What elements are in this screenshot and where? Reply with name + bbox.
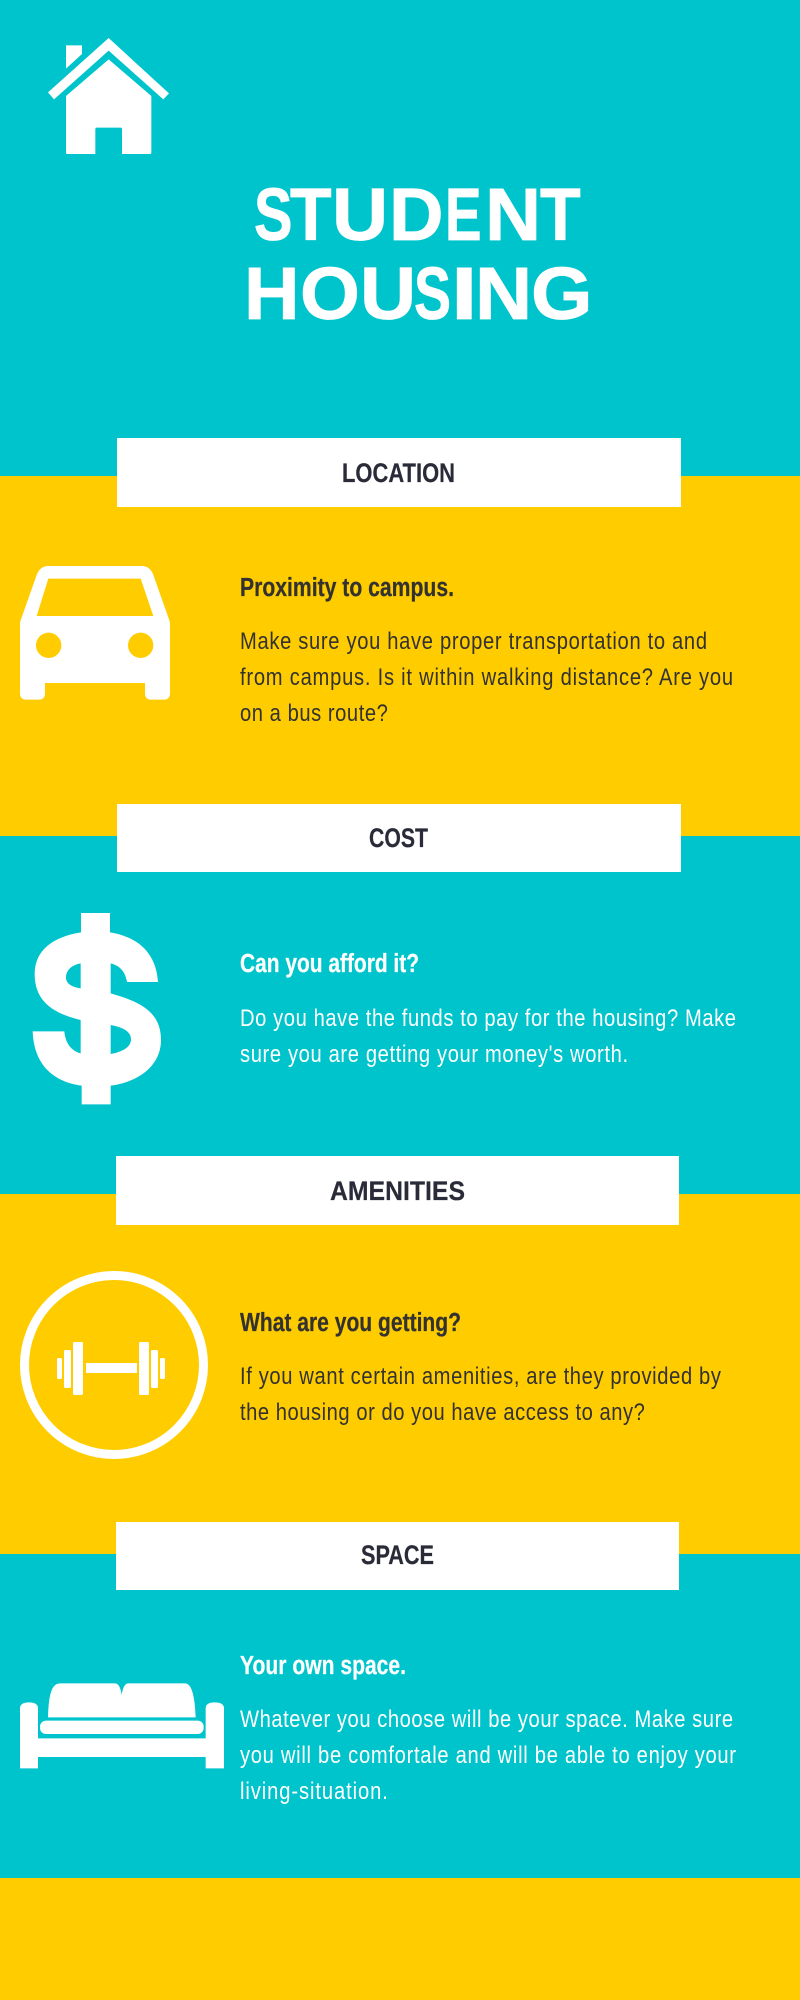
icon: house [48,38,169,154]
cost body text: Do you have the funds to pay for the housing? Make [240,1004,736,1031]
panel: location [20,438,733,726]
space body text [240,1705,737,1804]
title: D [389,173,443,256]
band: header background [0,0,800,476]
location header card [117,438,681,507]
space body text: living-situation. [240,1777,388,1804]
title: I [451,252,477,335]
amenities heading: What are you getting? [240,1309,461,1337]
space body text: Whatever you choose will be your space. Make sure [240,1705,733,1732]
location header card: LOCATION [342,458,455,488]
title: U [332,173,388,256]
title: G [531,252,593,335]
panel: amenities [24,1156,722,1454]
icon: sofa [20,1683,224,1768]
space header card [116,1522,679,1590]
space body text: you will be comfortale and will be able to enjoy your [240,1741,737,1768]
title: N [475,252,532,335]
title: S [254,173,292,256]
location heading: Proximity to campus. [240,574,454,602]
location body text: from campus. Is it within walking distance? Are you [240,663,733,690]
band: cost background [0,836,800,1194]
title [244,173,593,335]
title: U [360,252,416,335]
amenities body text: If you want certain amenities, are they provided by [240,1362,722,1389]
amenities header card: AMENITIES [330,1176,465,1206]
cost header card: COST [369,823,428,853]
location body text: Make sure you have proper transportation to and [240,627,707,654]
title: T [540,173,581,256]
icon: dumbbell in circle [24,1276,204,1454]
amenities header card [116,1156,679,1225]
location body text: on a bus route? [240,699,388,726]
cost body text [240,1004,736,1067]
cost header card [117,804,681,872]
icon: dollar sign [33,913,161,1104]
title: O [300,252,360,335]
band: amenities background [0,1194,800,1554]
title: H [244,252,299,335]
band: location background [0,476,800,836]
title: N [485,173,541,256]
cost heading: Can you afford it? [240,950,419,978]
cost body text: sure you are getting your money's worth. [240,1040,628,1067]
location body text [240,627,733,726]
band: footer background [0,1878,800,2000]
panel: cost [33,804,736,1104]
amenities body text: the housing or do you have access to any? [240,1398,645,1425]
amenities body text [240,1362,722,1425]
space header card: SPACE [361,1540,434,1570]
title: T [290,173,332,256]
panel: space [20,1522,737,1804]
band: space background [0,1554,800,1878]
space heading: Your own space. [240,1652,406,1680]
title: E [445,173,482,256]
icon: car [20,566,170,700]
title: S [414,252,451,335]
